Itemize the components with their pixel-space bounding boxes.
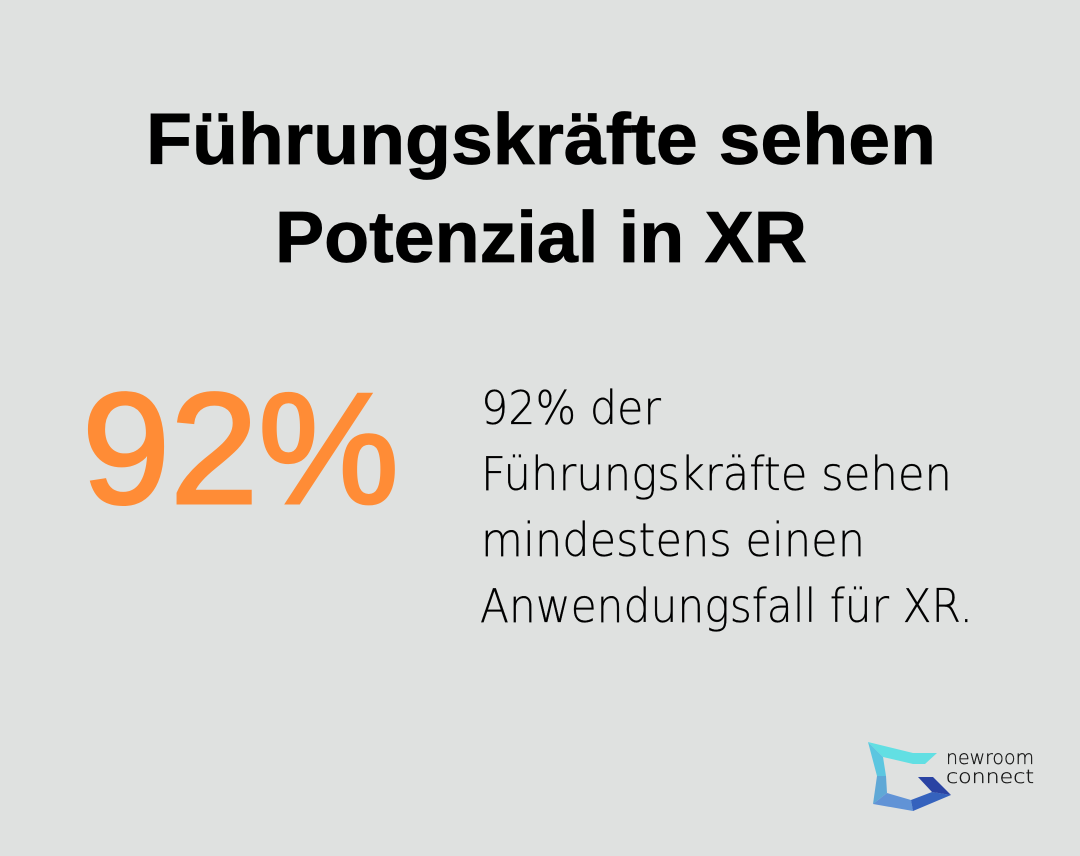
description text: mindestens einen — [481, 513, 865, 567]
description text: Anwendungsfall für XR. — [480, 579, 973, 633]
description text — [480, 381, 973, 633]
title: Potenzial in XR — [275, 198, 807, 278]
icon: logo mark — [868, 742, 951, 811]
logo: newroom connect — [868, 742, 1034, 811]
logo wordmark: connect — [946, 766, 1034, 788]
big statistic: 92%: 92% — [82, 361, 399, 537]
title — [146, 100, 936, 278]
description text: 92% der — [481, 381, 661, 435]
description text: Führungskräfte sehen — [481, 447, 952, 501]
title: Führungskräfte sehen — [146, 100, 936, 180]
logo wordmark: newroom — [946, 747, 1034, 769]
logo wordmark — [946, 747, 1034, 788]
